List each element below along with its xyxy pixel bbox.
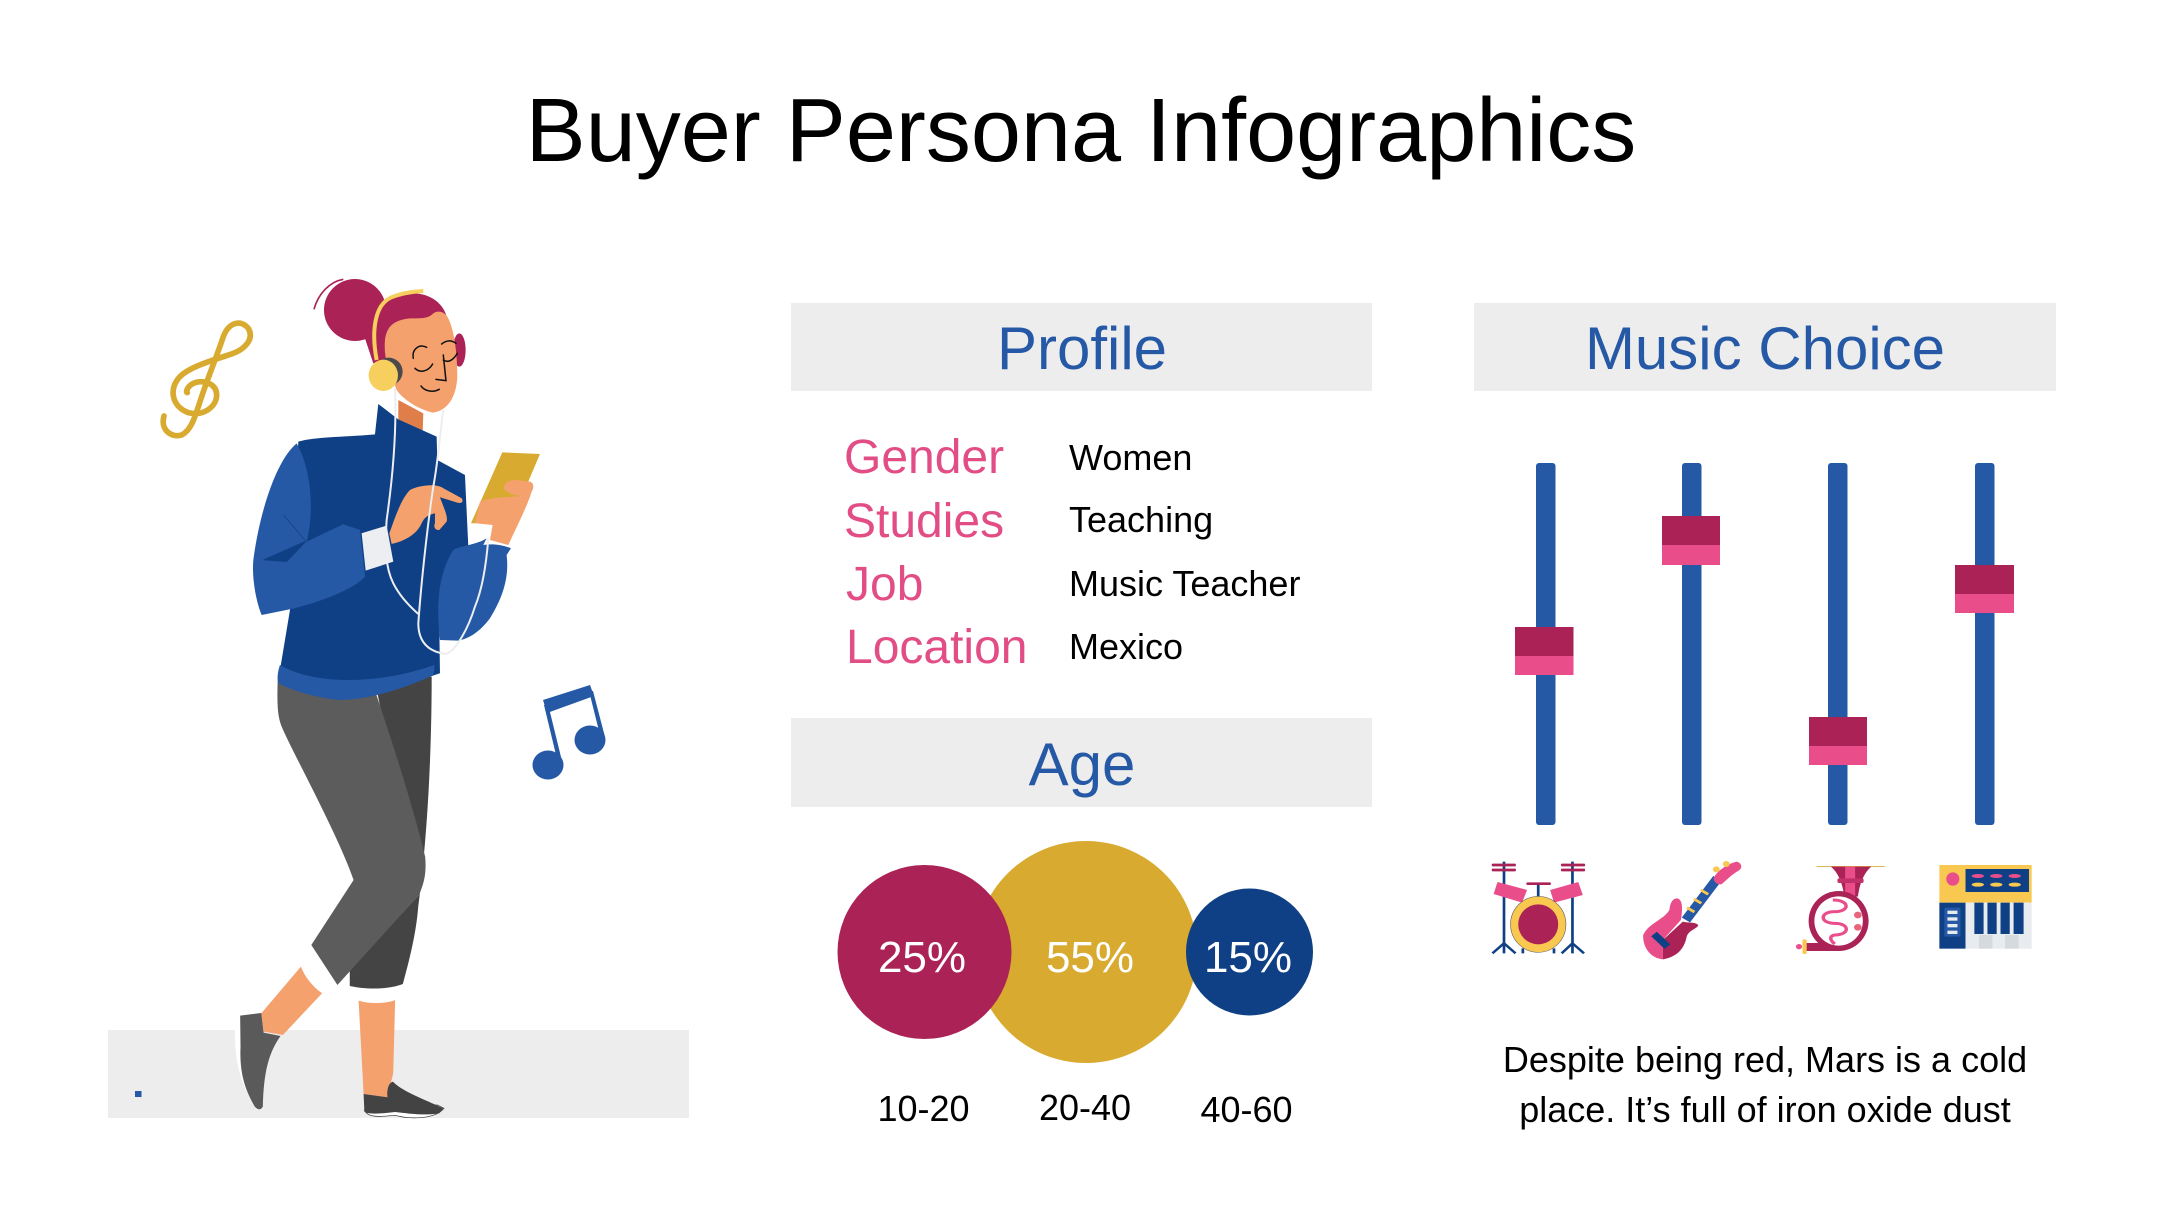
profile field labels: Gender	[844, 431, 1004, 484]
icon: music notes	[532, 685, 606, 780]
left sleeve	[253, 443, 365, 615]
hair	[314, 279, 466, 367]
pointing hand	[389, 485, 463, 544]
icon: synthesizer keyboard	[1939, 865, 2032, 949]
sweater torso	[278, 404, 468, 687]
profile field values: Mexico	[1069, 626, 1183, 667]
earphone cables	[386, 388, 488, 654]
description text: place. It’s full of iron oxide dust	[1519, 1089, 2011, 1130]
figure: lower body	[235, 677, 444, 1118]
icon: guitar	[1643, 861, 1741, 959]
slider chart	[1515, 463, 2014, 825]
description text: Despite being red, Mars is a cold	[1503, 1039, 2027, 1080]
sweater hem	[278, 665, 434, 700]
panel: persona illustration	[108, 279, 689, 1118]
profile field labels	[844, 431, 1027, 674]
profile field labels: Studies	[844, 495, 1004, 548]
age range labels: 10-20	[877, 1088, 970, 1129]
phone	[471, 452, 540, 523]
panel: age	[791, 718, 1372, 1130]
profile field values	[1069, 437, 1300, 667]
figure: upper body	[253, 279, 540, 700]
profile field labels: Job	[846, 558, 923, 611]
description text	[1503, 1039, 2027, 1130]
age heading bar	[791, 718, 1372, 807]
panel: profile	[791, 303, 1372, 674]
right sleeve	[438, 538, 511, 641]
age range labels	[877, 1087, 1293, 1130]
bubble chart: 25%	[878, 933, 966, 982]
profile field values: Music Teacher	[1069, 563, 1300, 604]
facial features	[413, 341, 457, 391]
title: Buyer Persona Infographics	[526, 81, 1636, 181]
age range labels: 20-40	[1039, 1087, 1131, 1128]
holding hand	[475, 480, 533, 545]
profile field values: Teaching	[1069, 499, 1213, 540]
panel: music choice	[1474, 303, 2056, 1130]
bubble chart: 55%	[1046, 933, 1134, 982]
bubble chart	[838, 841, 1313, 1063]
cuff	[362, 526, 393, 571]
instrument icons	[1492, 861, 2032, 959]
small blue dot	[135, 1091, 142, 1097]
neck	[398, 400, 423, 433]
profile heading bar	[791, 303, 1372, 391]
profile field labels: Location	[846, 621, 1027, 674]
icon: french horn	[1796, 866, 1885, 954]
icon: drum kit	[1492, 862, 1585, 953]
bubble chart: 15%	[1204, 933, 1292, 982]
floor bar	[108, 1030, 689, 1118]
icon: treble clef	[163, 323, 250, 436]
age heading: Age	[1029, 731, 1135, 798]
profile heading: Profile	[997, 315, 1167, 382]
music choice heading: Music Choice	[1585, 315, 1945, 382]
age range labels: 40-60	[1200, 1089, 1293, 1130]
headphones	[369, 291, 423, 391]
profile field values: Women	[1069, 437, 1192, 478]
face	[385, 312, 457, 413]
music choice heading bar	[1474, 303, 2056, 391]
